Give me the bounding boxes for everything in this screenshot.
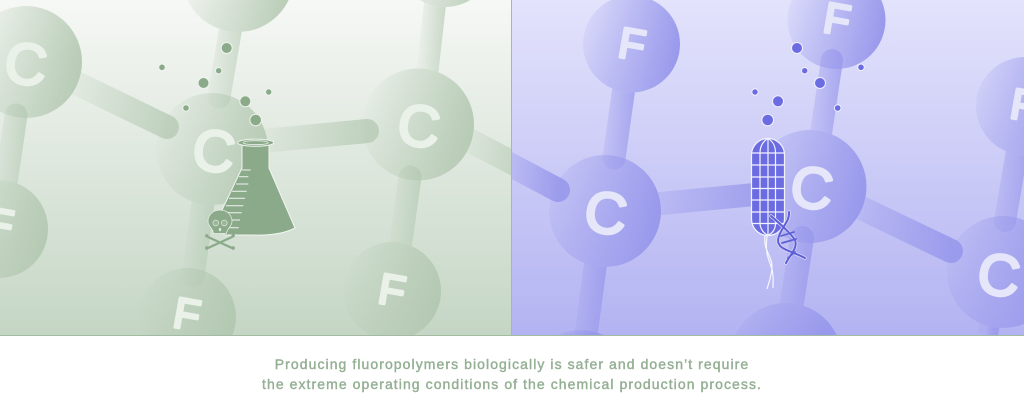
atom: fluorine right: F [375, 265, 409, 317]
atom: top centre [188, 0, 288, 32]
atom: carbon lower right [957, 216, 1024, 328]
atom: carbon right: C [394, 91, 444, 162]
icon: skull and crossbones [205, 210, 235, 250]
atom: carbon right [362, 68, 474, 180]
icon: flask [213, 139, 295, 235]
atom: fluorine top left: F [615, 19, 649, 71]
atom: top right [420, 0, 470, 7]
bottom rule [0, 335, 1024, 336]
atom: carbon top left [0, 6, 82, 118]
atom: fluorine bottom [171, 268, 236, 335]
molecule: chemical panel [0, 0, 511, 335]
icon: bacterium [752, 138, 784, 289]
atom: carbon centre: C [189, 116, 239, 187]
atom: carbon centre [168, 93, 267, 205]
atom: carbon left: C [581, 178, 631, 249]
atom: fluorine right edge [976, 57, 1024, 155]
panel: chemical production [0, 0, 511, 335]
atom: bottom centre [745, 304, 836, 335]
atom: carbon left [549, 155, 661, 267]
bubbles: biological panel [752, 42, 864, 126]
caption: Producing fluoropolymers biologically is safer and doesn’t require [275, 356, 749, 372]
atom: fluorine top centre [788, 0, 886, 69]
atom: fluorine left [0, 180, 48, 278]
panel: biological production [505, 0, 1024, 335]
atom: carbon centre: C [787, 153, 837, 224]
atom: carbon top left: C [1, 29, 51, 100]
bubbles: chemical panel [159, 42, 272, 126]
molecule: biological panel [505, 0, 1024, 335]
caption: the extreme operating conditions of the chemical production process. [262, 376, 762, 392]
panel divider [511, 0, 512, 335]
atom: carbon lower right: C [974, 240, 1024, 311]
atom: carbon centre [778, 130, 866, 243]
caption [262, 356, 762, 392]
atom: fluorine right [370, 242, 441, 335]
atom: fluorine top left [583, 0, 680, 92]
icon: DNA strand [771, 212, 805, 263]
atom: bottom left [562, 330, 602, 335]
